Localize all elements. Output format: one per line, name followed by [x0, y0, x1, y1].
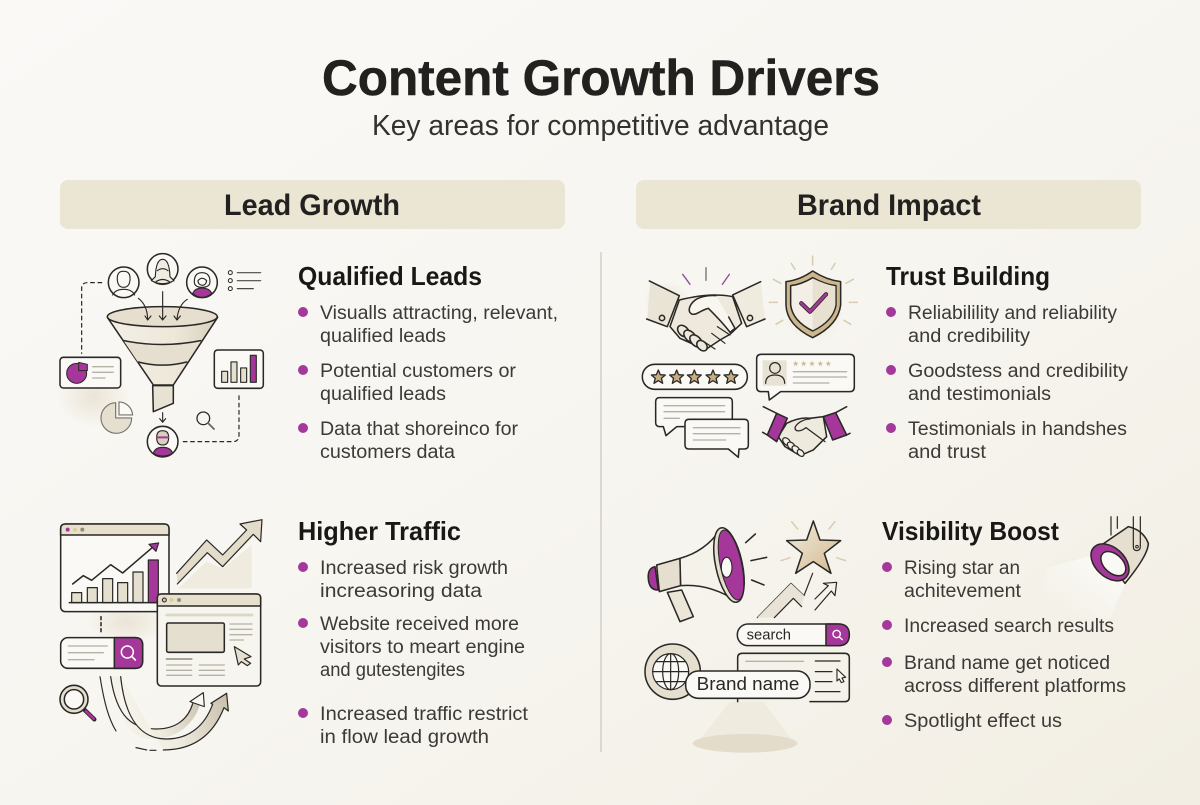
bullet list: Visibility Boost [882, 558, 1126, 732]
bullet list: Higher Traffic: Increased risk growth [320, 558, 508, 579]
bullet list: Qualified Leads: qualified leads [320, 384, 446, 405]
bullet list: Trust Building: Reliabilility and reliability [908, 303, 1118, 324]
bullet list: Qualified Leads: customers data [320, 442, 455, 463]
bullet list: Higher Traffic: in flow lead growth [320, 727, 489, 748]
bullet list: Trust Building [886, 303, 1129, 463]
title: Content Growth Drivers [322, 50, 880, 106]
panel: Trust Building [642, 256, 1129, 463]
icon: megaphone, star, search and brand name: search [747, 627, 791, 643]
bullet list: Trust Building: Testimonials in handshes [908, 419, 1127, 440]
bullet list: Trust Building: and testimonials [908, 384, 1051, 405]
column header: Brand Impact: Brand Impact [797, 189, 981, 222]
bullet list: Qualified Leads: Visualls attracting, relevant, [320, 303, 558, 324]
icon: handshakes, shield and reviews [642, 256, 857, 458]
icon: traffic charts, browser windows and arrows [60, 520, 262, 750]
bullet list: Higher Traffic: increasoring data [320, 581, 482, 602]
bullet list: Higher Traffic [298, 558, 529, 748]
bullet list: Higher Traffic: visitors to meart engine [320, 637, 525, 658]
heading: Qualified Leads: Qualified Leads [298, 261, 482, 291]
bullet list: Visibility Boost: Brand name get noticed [904, 653, 1110, 674]
bullet list: Trust Building: and trust [908, 442, 987, 463]
icon: spotlight lamp [1040, 517, 1148, 618]
bullet list: Visibility Boost: Increased search results [904, 616, 1114, 637]
bullet list: Visibility Boost: across different platforms [904, 676, 1126, 697]
bullet list: Higher Traffic: and gutestengites [320, 660, 465, 681]
column header: Lead Growth: Lead Growth [224, 189, 400, 222]
bullet list: Visibility Boost: Spotlight effect us [904, 711, 1062, 732]
panel: Visibility Boost [645, 516, 1148, 753]
bullet list: Visibility Boost: Rising star an [904, 558, 1020, 579]
column header: Lead Growth [60, 180, 565, 229]
bullet list: Qualified Leads [298, 303, 558, 463]
icon: megaphone, star, search and brand name: Brand name [697, 673, 799, 694]
panel: Qualified Leads [57, 254, 558, 463]
bullet list: Trust Building: Goodstess and credibility [908, 361, 1129, 382]
subtitle: Key areas for competitive advantage [372, 110, 829, 142]
bullet list: Qualified Leads: qualified leads [320, 326, 446, 347]
heading: Trust Building: Trust Building [886, 261, 1050, 291]
bullet list: Qualified Leads: Potential customers or [320, 361, 517, 382]
bullet list: Qualified Leads: Data that shoreinco for [320, 419, 519, 440]
icon: megaphone, star, search and brand name [645, 521, 849, 753]
bullet list: Higher Traffic: Increased traffic restrict [320, 704, 529, 725]
heading: Visibility Boost: Visibility Boost [882, 516, 1059, 546]
icon: lead funnel with people and charts [57, 254, 263, 457]
panel: Higher Traffic [60, 516, 529, 750]
bullet list: Visibility Boost: achitevement [904, 581, 1022, 602]
bullet list: Higher Traffic: Website received more [320, 614, 519, 635]
bullet list: Trust Building: and credibility [908, 326, 1031, 347]
heading: Higher Traffic: Higher Traffic [298, 516, 461, 546]
column header: Brand Impact [636, 180, 1141, 229]
